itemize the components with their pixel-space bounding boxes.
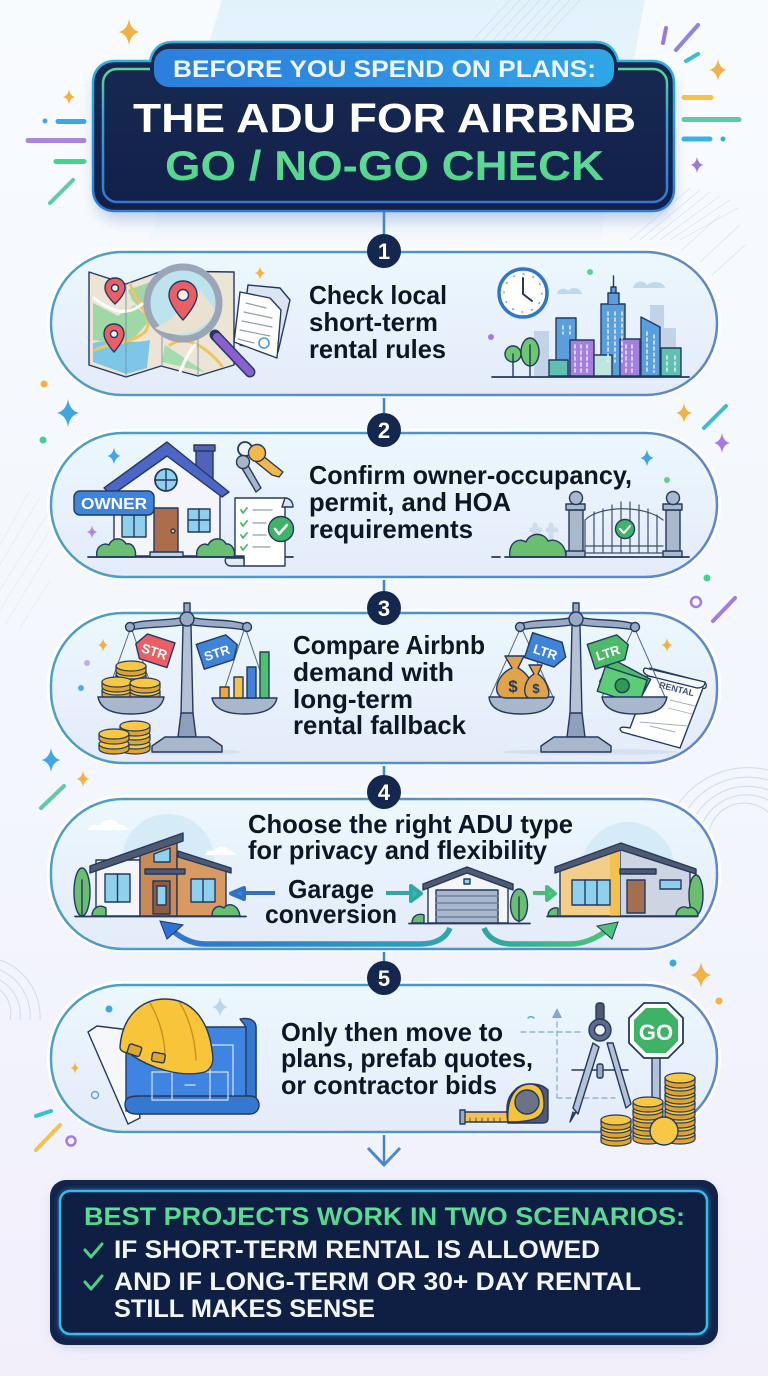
- icon: checklist: [225, 498, 294, 566]
- icon: scale with LTR tags, money and lease: $: [508, 677, 518, 696]
- text: garage conversion: conversion: [265, 899, 397, 929]
- text: confirm requirements: Confirm owner-occupancy,: [309, 460, 632, 490]
- arrow: left: [231, 888, 275, 899]
- icon: rental lease: [620, 668, 706, 748]
- panel 1: local rules: [47, 234, 721, 398]
- title banner: [93, 42, 674, 220]
- arrow: curved blue: [160, 921, 450, 944]
- text: confirm requirements: requirements: [309, 514, 473, 544]
- text: confirm requirements: permit, and HOA: [309, 487, 511, 517]
- panel 3: compare demand: [47, 591, 721, 766]
- text: choose ADU type: [248, 809, 573, 865]
- panel 4: ADU type: [47, 775, 721, 952]
- step badge 4: 4: [378, 780, 391, 805]
- icon: scale with STR tags: [78, 603, 277, 755]
- icon: HOA gate: [492, 450, 689, 557]
- icon: garage: [409, 867, 530, 924]
- icon: scale with LTR tags, money and lease: LTR: [594, 642, 622, 664]
- text: move to plans: or contractor bids: [281, 1070, 497, 1100]
- text: move to plans: plans, prefab quotes,: [281, 1043, 533, 1073]
- text: garage conversion: Garage: [288, 874, 374, 904]
- step badge 5: [367, 961, 401, 995]
- check item 1: IF SHORT-TERM RENTAL IS ALLOWED: [114, 1236, 600, 1264]
- icon: house with owner sign: OWNER: [81, 496, 147, 513]
- text: check local rules: Check local: [309, 280, 447, 310]
- check item 2: [85, 1268, 641, 1323]
- icon: clock: [499, 269, 547, 317]
- text: move to plans: Only then move to: [281, 1017, 503, 1047]
- text: compare demand: [293, 630, 485, 740]
- icon: city skyline: [492, 276, 689, 377]
- icon: keys: [236, 442, 283, 492]
- icon: document: [234, 285, 290, 358]
- closing callout: [50, 1180, 718, 1346]
- step badge 2: 2: [378, 418, 390, 443]
- icon: go sign with coins: [601, 1003, 695, 1146]
- panel 2: owner occupancy: [47, 413, 721, 580]
- dots: [488, 269, 593, 340]
- icon: compass and axis marks: [521, 1003, 631, 1122]
- step badge 4: [367, 775, 401, 809]
- title tab: [154, 49, 614, 87]
- icon: scale with LTR tags, money and lease: [489, 603, 706, 755]
- text: confirm requirements: [309, 460, 632, 544]
- title tab: BEFORE YOU SPEND ON PLANS:: [173, 56, 596, 83]
- text: choose ADU type: for privacy and flexibility: [248, 835, 548, 865]
- icon: scale with LTR tags, money and lease: $: [532, 681, 540, 696]
- arrow: centre: [386, 886, 421, 901]
- text: compare demand: long-term: [293, 684, 413, 714]
- text: choose ADU type: Choose the right ADU type: [248, 809, 573, 839]
- step badge 3: [367, 591, 401, 625]
- step badge 1: [367, 234, 401, 268]
- icon: scale with STR tags: STR: [202, 642, 232, 664]
- title line 2: GO / NO-GO CHECK: [165, 142, 604, 189]
- callout heading: BEST PROJECTS WORK IN TWO SCENARIOS:: [84, 1203, 685, 1231]
- icon: map with magnifier: [89, 267, 290, 377]
- text: compare demand: rental fallback: [293, 710, 467, 740]
- text: compare demand: demand with: [293, 657, 454, 687]
- icon: blueprint and hard hat: [71, 997, 259, 1124]
- icon: modern house: [547, 843, 703, 916]
- title line 1: THE ADU FOR AIRBNB: [133, 95, 636, 141]
- text: garage conversion: [265, 874, 397, 929]
- text: check local rules: rental rules: [309, 334, 446, 364]
- step badge 3: 3: [378, 596, 390, 621]
- icon: scale with STR tags: STR: [140, 640, 170, 663]
- step badge 1: 1: [378, 239, 390, 264]
- check item 2: AND IF LONG-TERM OR 30+ DAY RENTAL: [114, 1268, 641, 1296]
- check item 2: STILL MAKES SENSE: [114, 1295, 375, 1323]
- text: check local rules: [309, 280, 447, 364]
- text: compare demand: Compare Airbnb: [293, 630, 485, 660]
- arrow: right: [533, 887, 555, 900]
- icon: tape measure: [460, 1084, 548, 1124]
- step badge 5: 5: [378, 966, 390, 991]
- step badge 2: [367, 413, 401, 447]
- connector line: [368, 211, 400, 1165]
- icon: rental lease: RENTAL: [658, 680, 696, 698]
- icon: go sign with coins: GO: [639, 1020, 673, 1045]
- icon: scale with LTR tags, money and lease: LTR: [531, 641, 560, 663]
- text: move to plans: [281, 1017, 533, 1100]
- icon: house with owner sign: [74, 442, 293, 557]
- sparkle: [255, 266, 265, 280]
- arrow: curved green: [484, 922, 618, 944]
- text: check local rules: short-term: [309, 307, 438, 337]
- panel 5: move to plans: [47, 961, 721, 1146]
- icon: two-storey house: [74, 833, 246, 916]
- decorative sparkles and dashes: [28, 19, 739, 1150]
